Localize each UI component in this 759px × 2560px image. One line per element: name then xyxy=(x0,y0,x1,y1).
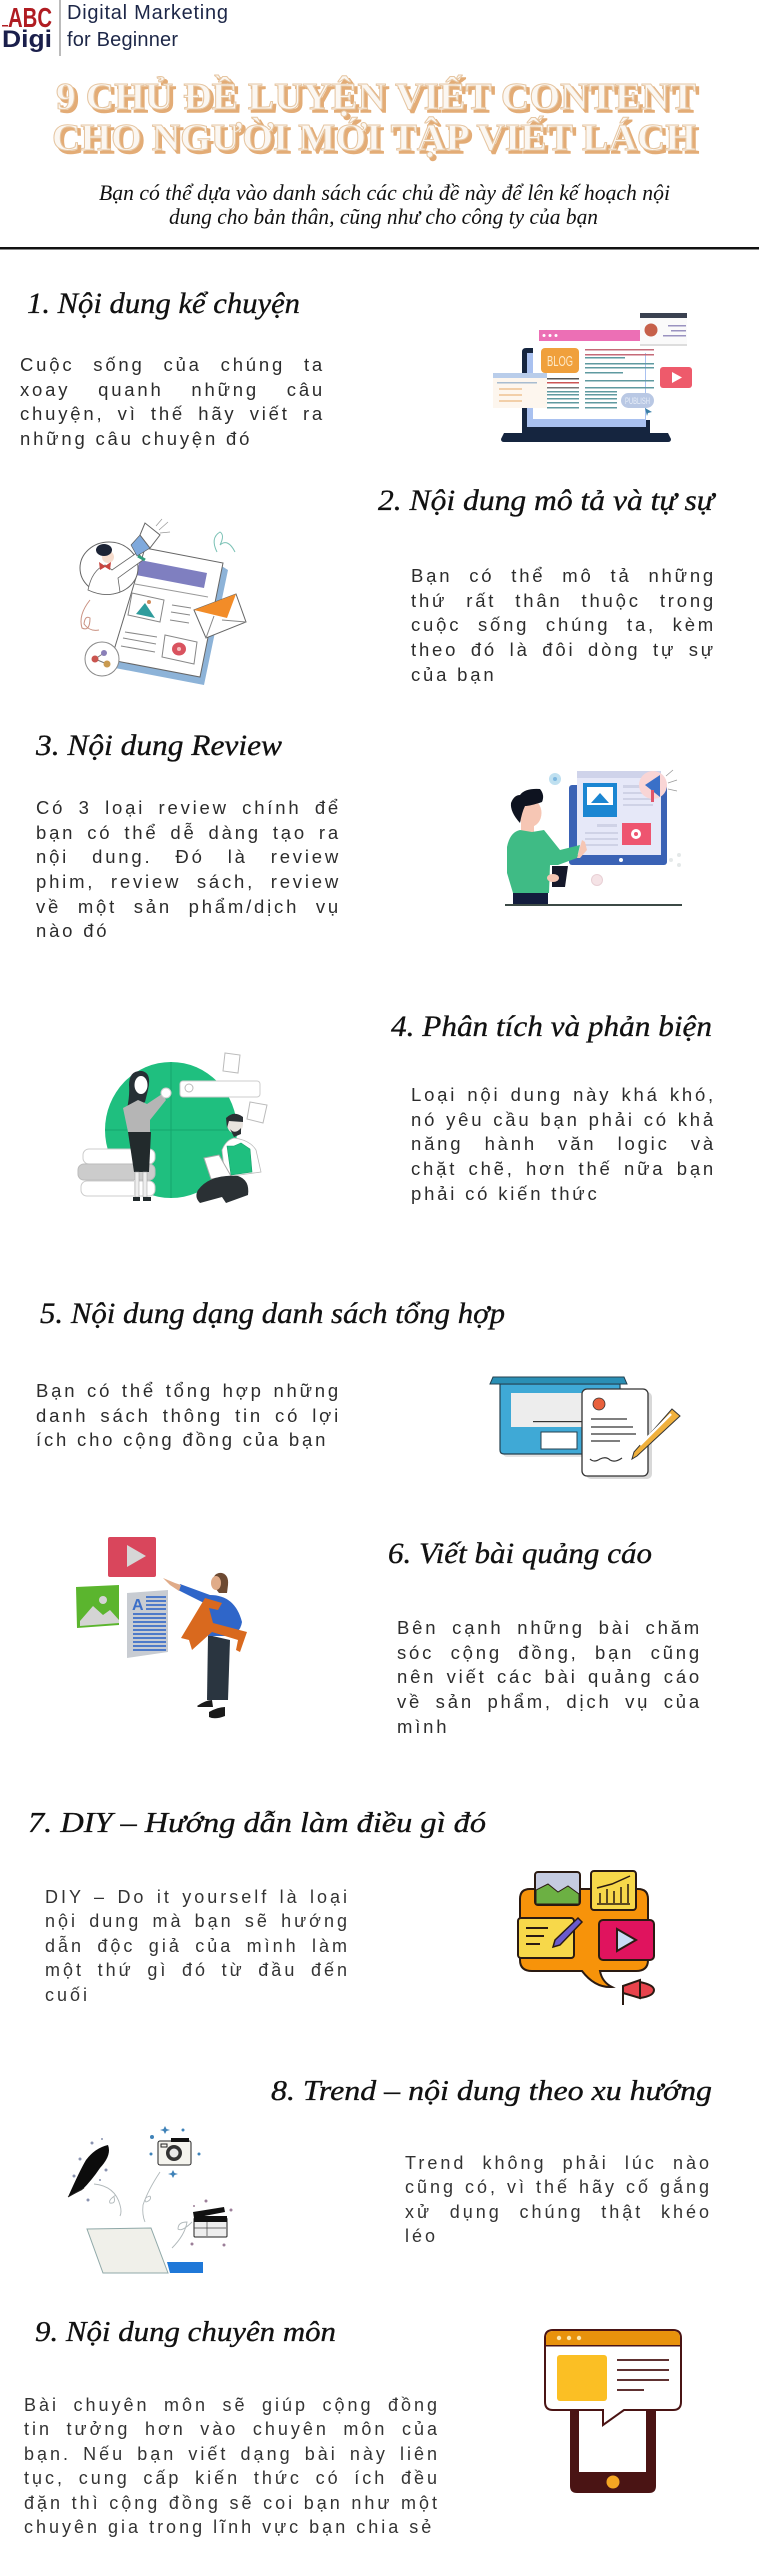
icon: laptop and document with pen xyxy=(490,1377,680,1479)
body text 8 xyxy=(405,2153,712,2246)
icon: man presenting monitor xyxy=(505,770,682,906)
icon: man with media cards xyxy=(76,1537,247,1718)
heading 1: 1. Nội dung kể chuyện xyxy=(27,287,300,320)
icon: man with media cards: A xyxy=(132,1597,144,1614)
title: CHO NGƯỜI MỚI TẬP VIẾT LÁCH xyxy=(55,119,699,162)
subtitle: dung cho bản thân, cũng như cho công ty của bạn xyxy=(169,204,598,229)
body text 4: phải có kiến thức xyxy=(411,1183,600,1204)
body text 3: bạn có thể dễ dàng tạo ra xyxy=(36,822,341,843)
body text 4: nó yêu cầu bạn phải có khả xyxy=(411,1109,716,1130)
icon: globe with people xyxy=(78,1053,267,1203)
body text 9: tin tưởng hơn vào chuyên môn của xyxy=(24,2419,440,2439)
body text 1: những câu chuyện đó xyxy=(20,428,252,449)
icon: orange speech bubble with media xyxy=(518,1871,654,2005)
body text 3: phim, review sách, review xyxy=(36,871,341,892)
body text 2: Bạn có thể mô tả những xyxy=(411,565,716,586)
body text 3: Có 3 loại review chính để xyxy=(36,797,341,818)
body text 9: chuyên gia trong lĩnh vực bạn chia sẻ xyxy=(24,2517,434,2537)
body text 7: một thứ gì đó từ đầu đến xyxy=(45,1960,350,1980)
body text 6: Bên cạnh những bài chăm xyxy=(397,1617,702,1638)
body text 7 xyxy=(45,1887,350,2005)
body text 9 xyxy=(24,2395,440,2537)
body text 4: chặt chẽ, hơn thế nữa bạn xyxy=(411,1158,716,1179)
icon: laptop with feather, camera and clapper xyxy=(68,2126,232,2273)
body text 4: Loại nội dung này khá khó, xyxy=(411,1084,716,1105)
icon: blog laptop: PUBLISH xyxy=(625,396,650,406)
heading 2: 2. Nội dung mô tả và tự sự xyxy=(378,484,717,517)
title xyxy=(52,75,699,162)
logo: ABC Digi: Digital Marketing xyxy=(67,2,228,24)
body text 8: cũng có, vì thế hãy cố gắng xyxy=(405,2177,712,2197)
title: 9 CHỦ ĐỀ LUYỆN VIẾT CONTENT xyxy=(59,78,699,121)
body text 5 xyxy=(36,1380,341,1450)
subtitle: Bạn có thể dựa vào danh sách các chủ đề này để lên kế hoạch nội xyxy=(99,180,670,205)
logo: ABC Digi: ABC xyxy=(8,2,52,33)
subtitle xyxy=(99,180,670,229)
heading 3: 3. Nội dung Review xyxy=(35,729,282,762)
icon: phone with speech bubble xyxy=(545,2330,681,2493)
body text 2 xyxy=(411,565,716,685)
body text 7: cuối xyxy=(45,1985,90,2005)
title: 9 CHỦ ĐỀ LUYỆN VIẾT CONTENT xyxy=(56,75,696,118)
heading 5: 5. Nội dung dạng danh sách tổng hợp xyxy=(40,1297,505,1330)
body text 3: về một sản phẩm/dịch vụ xyxy=(36,896,341,917)
body text 8: léo xyxy=(405,2226,438,2246)
body text 5: danh sách thông tin có lợi xyxy=(36,1405,341,1426)
heading 9: 9. Nội dung chuyên môn xyxy=(35,2317,336,2348)
heading 7: 7. DIY – Hướng dẫn làm điều gì đó xyxy=(28,1808,486,1839)
body text 7: nội dung mà bạn sẽ hướng xyxy=(45,1911,350,1931)
body text 9: Bài chuyên môn sẽ giúp cộng đồng xyxy=(24,2395,440,2415)
body text 8: xử dụng chúng thật khéo xyxy=(405,2202,712,2222)
body text 2: cuộc sống chúng ta, kèm xyxy=(411,614,716,635)
body text 3 xyxy=(36,797,341,941)
logo: ABC Digi xyxy=(2,0,228,56)
icon: blog laptop: BLOG xyxy=(547,353,573,370)
logo: ABC Digi: for Beginner xyxy=(67,29,178,51)
body text 9: bạn. Nếu bạn viết dạng bài này liên xyxy=(24,2444,440,2464)
body text 6: sóc cộng đồng, bạn cũng xyxy=(397,1642,702,1663)
body text 4 xyxy=(411,1084,716,1204)
heading 8: 8. Trend – nội dung theo xu hướng xyxy=(271,2076,712,2107)
heading 4: 4. Phân tích và phản biện xyxy=(391,1010,712,1043)
body text 7: dẫn độc giả của mình làm xyxy=(45,1936,350,1956)
body text 9: tục, cung cấp kiến thức có ích đều xyxy=(24,2468,440,2488)
body text 6 xyxy=(397,1617,702,1737)
body text 2: của bạn xyxy=(411,664,496,685)
body text 8: Trend không phải lúc nào xyxy=(405,2153,712,2173)
title: CHO NGƯỜI MỚI TẬP VIẾT LÁCH xyxy=(52,116,696,159)
body text 3: nội dung. Đó là review xyxy=(36,846,341,867)
body text 6: về sản phẩm, dịch vụ của xyxy=(397,1691,702,1712)
body text 9: đặn thì cộng đồng sẽ coi bạn như một xyxy=(24,2493,440,2513)
body text 1: chuyện, vì thế hãy viết ra xyxy=(20,403,325,424)
body text 2: thứ rất thân thuộc trong xyxy=(411,590,716,611)
body text 4: năng hành văn logic và xyxy=(411,1133,716,1154)
body text 6: nên viết các bài quảng cáo xyxy=(397,1666,702,1687)
body text 5: Bạn có thể tổng hợp những xyxy=(36,1380,341,1401)
body text 2: theo đó là đôi dòng tự sự xyxy=(411,639,716,660)
body text 1: Cuộc sống của chúng ta xyxy=(20,354,325,375)
logo: ABC Digi: Digi xyxy=(2,26,52,53)
icon: blog laptop xyxy=(493,313,692,442)
icon: document with megaphone and envelope xyxy=(80,519,246,685)
body text 5: ích cho cộng đồng của bạn xyxy=(36,1429,328,1450)
body text 1: xoay quanh những câu xyxy=(20,379,325,400)
body text 3: nào đó xyxy=(36,920,109,941)
heading 6: 6. Viết bài quảng cáo xyxy=(388,1537,652,1570)
body text 1 xyxy=(20,354,325,449)
body text 6: mình xyxy=(397,1716,449,1737)
body text 7: DIY – Do it yourself là loại xyxy=(45,1887,350,1907)
